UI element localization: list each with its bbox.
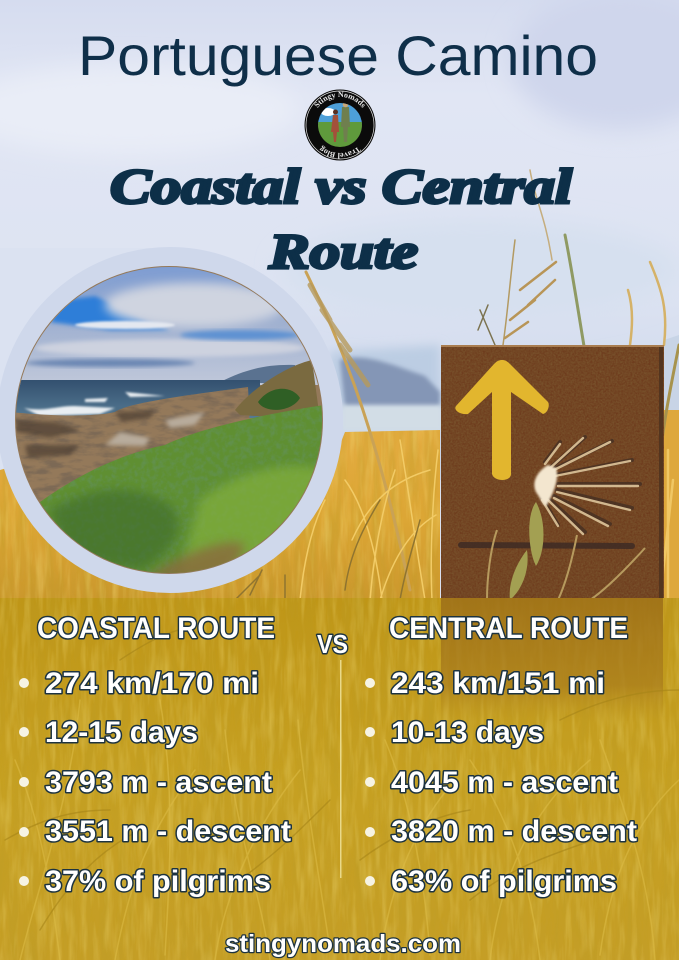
list: coastal route facts xyxy=(19,667,291,898)
list: central route facts: 243 km/151 mi xyxy=(391,667,605,700)
heading: central route: CENTRAL ROUTE xyxy=(389,612,628,645)
list: central route facts xyxy=(365,667,637,898)
background: sky and wheat field xyxy=(0,0,679,610)
subtitle: Route xyxy=(268,223,418,279)
title: Portuguese Camino xyxy=(78,24,598,87)
column: coastal route xyxy=(19,612,291,898)
subtitle: Coastal vs Central xyxy=(110,158,572,214)
icon: Stingy Nomads logo xyxy=(304,90,376,160)
list: central route facts: 4045 m - ascent xyxy=(391,766,618,799)
icon: scallop shell xyxy=(534,437,640,534)
icon: yellow arrow xyxy=(455,360,549,480)
foreground grass stems xyxy=(235,170,679,600)
icon: Stingy Nomads logo: Stingy Nomads xyxy=(314,92,365,108)
list: coastal route facts: 3793 m - ascent xyxy=(45,766,272,799)
icon: Stingy Nomads logo: Travel Blog xyxy=(320,146,362,158)
list: coastal route facts: 3551 m - descent xyxy=(45,815,291,848)
photo frame: pale ring xyxy=(0,248,333,583)
photo: rocky Atlantic coast xyxy=(10,260,330,580)
vs divider: VS xyxy=(317,629,348,659)
column: central route xyxy=(365,612,637,898)
list: central route facts: 10-13 days xyxy=(391,716,544,749)
list: coastal route facts: 37% of pilgrims xyxy=(45,865,271,898)
wayside marker sign xyxy=(441,346,664,601)
subtitle xyxy=(110,158,572,279)
heading: coastal route: COASTAL ROUTE xyxy=(37,612,275,645)
list: coastal route facts: 274 km/170 mi xyxy=(45,667,259,700)
list: central route facts: 3820 m - descent xyxy=(391,815,637,848)
list: coastal route facts: 12-15 days xyxy=(45,716,198,749)
footer website: stingynomads.com xyxy=(225,930,461,958)
list: central route facts: 63% of pilgrims xyxy=(391,865,617,898)
bottom translucent comparison panel xyxy=(0,598,679,960)
